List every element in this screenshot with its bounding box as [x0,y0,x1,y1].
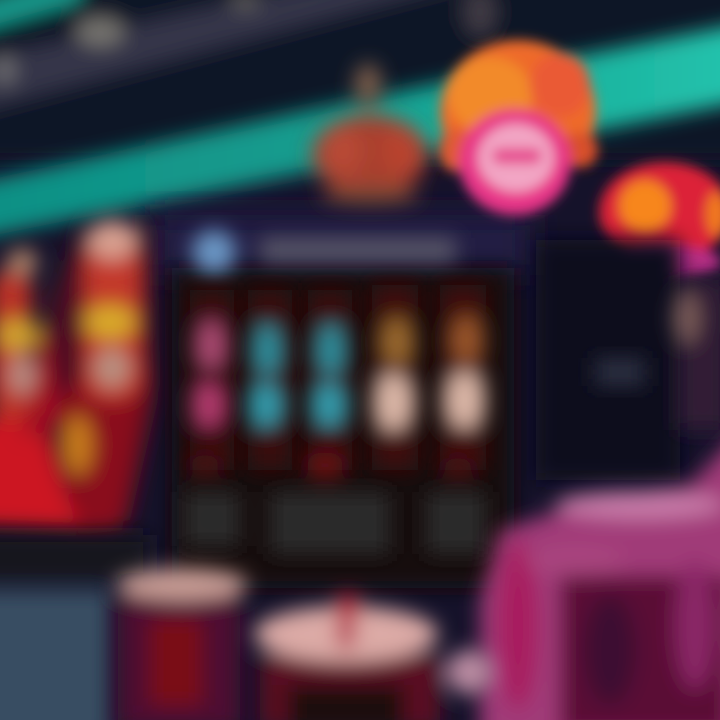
reel column 3 [308,290,352,470]
lower machine panels [184,452,486,554]
reel column 2 [247,290,292,470]
right red and orange sign [599,162,720,277]
faint panel reflection [595,358,645,386]
reel column 4 [372,285,418,470]
center stool [254,593,494,720]
machine top label [192,230,456,274]
pink table lower right [480,420,720,720]
right edge figure [673,280,720,430]
slot machine cabinet [172,230,514,588]
ceiling [0,0,720,160]
teal neon band [0,22,720,240]
right dark panel [536,240,680,480]
floor left [0,535,150,720]
reel column 1 [190,290,234,470]
crown sign [312,63,428,204]
left stool [116,568,248,720]
lower wall shade [150,215,530,275]
left red figures [0,220,158,535]
round orange and pink sign [439,40,598,215]
reel column 5 [440,285,486,470]
